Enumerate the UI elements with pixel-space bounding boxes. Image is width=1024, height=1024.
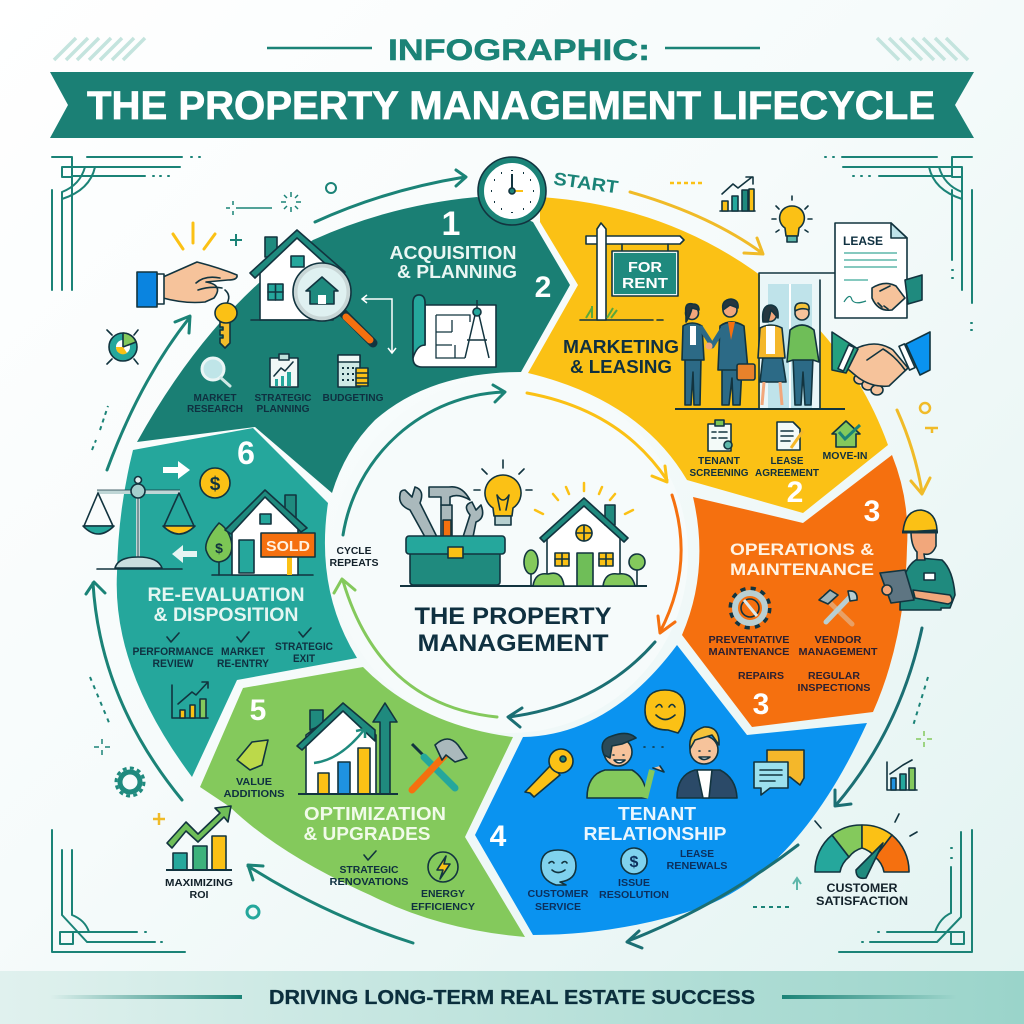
heading: optimization: & UPGRADES bbox=[304, 824, 430, 844]
panel: 6 re-evaluation: 6 bbox=[237, 435, 255, 471]
icon: scattered left decorations bbox=[90, 677, 259, 918]
centre: heading bbox=[414, 603, 612, 657]
icon: tenant figure bbox=[587, 733, 664, 798]
icon: plus bbox=[230, 234, 242, 246]
list: operations items: MAINTENANCE bbox=[708, 646, 790, 658]
icon: value additions bbox=[224, 740, 284, 800]
centre: heading: THE PROPERTY bbox=[414, 603, 612, 630]
icon: left sparks bbox=[92, 183, 336, 450]
list: re-evaluation items: PERFORMANCE bbox=[132, 646, 214, 658]
label: step 2: 2 bbox=[535, 271, 551, 304]
icon: sold house: SOLD bbox=[266, 538, 310, 555]
heading: acquisition bbox=[390, 243, 517, 282]
heading: re-evaluation: & DISPOSITION bbox=[154, 605, 298, 626]
heading: acquisition: ACQUISITION bbox=[390, 243, 516, 263]
item: energy efficiency: EFFICIENCY bbox=[411, 901, 475, 913]
icon: dashes bbox=[670, 182, 702, 184]
label: step 1: 1 bbox=[442, 205, 460, 243]
icon: for rent sign: RENT bbox=[622, 275, 668, 292]
bottom band: DRIVING LONG-TERM REAL ESTATE SUCCESS bbox=[269, 987, 755, 1009]
icon: doorway bbox=[675, 273, 845, 409]
label: step 4: 4 bbox=[490, 820, 507, 853]
icon: small chart bbox=[172, 682, 208, 718]
item: customer service bbox=[528, 850, 589, 913]
icon: agent figure bbox=[677, 727, 737, 798]
heading: re-evaluation bbox=[148, 585, 304, 626]
icon: woman agent bbox=[682, 304, 712, 405]
panel: 2 marketing and leasing bbox=[528, 197, 930, 513]
icon: customer satisfaction gauge: SATISFACTION bbox=[816, 894, 908, 908]
icon: small chart top bbox=[720, 177, 755, 211]
list: operations items: VENDOR bbox=[814, 634, 862, 646]
icon: smiley bubble bbox=[645, 690, 685, 733]
icon: big handshake bbox=[832, 332, 930, 395]
icon: for rent sign: FOR bbox=[628, 259, 662, 276]
item: move-in bbox=[822, 421, 868, 462]
icon: arrows and coin bbox=[163, 461, 230, 563]
panel: 3 operations and maintenance bbox=[682, 455, 955, 727]
item: budgeting bbox=[322, 355, 384, 404]
icon: scales bbox=[83, 476, 195, 569]
icon: small chart right and sparks bbox=[753, 677, 932, 907]
list: re-evaluation items: STRATEGIC bbox=[275, 641, 333, 653]
icon: arrows and coin: $ bbox=[210, 474, 221, 495]
label: cycle repeats: CYCLE bbox=[336, 545, 372, 557]
item: strategic planning: PLANNING bbox=[256, 403, 310, 415]
list: operations items: INSPECTIONS bbox=[798, 682, 870, 694]
heading: infographic: INFOGRAPHIC: bbox=[388, 34, 650, 67]
icon: dots bbox=[644, 746, 663, 748]
icon: blueprint and compass bbox=[413, 295, 496, 367]
icon: clock bbox=[478, 157, 546, 225]
icon: crossed hammer and screwdriver bbox=[412, 739, 467, 790]
heading: tenant relationship: RELATIONSHIP bbox=[584, 824, 726, 844]
heading: marketing: MARKETING bbox=[563, 337, 679, 357]
centre: house bbox=[524, 483, 645, 586]
heading: operations: MAINTENANCE bbox=[730, 560, 874, 579]
item: tenant screening bbox=[690, 420, 748, 479]
list: operations items: PREVENTATIVE bbox=[708, 634, 790, 646]
icon: key bbox=[525, 749, 573, 797]
icon: house with growth bbox=[297, 703, 398, 794]
item: lease renewals bbox=[666, 848, 728, 872]
panel: 5 optimization and upgrades bbox=[200, 667, 525, 937]
item: strategic planning: STRATEGIC bbox=[254, 392, 312, 404]
list: re-evaluation items: REVIEW bbox=[152, 658, 194, 670]
icon: value additions: VALUE bbox=[236, 776, 272, 788]
icon: sold house: $ bbox=[215, 540, 223, 556]
item: issue resolution: RESOLUTION bbox=[599, 889, 669, 901]
heading: operations: OPERATIONS & bbox=[730, 540, 874, 559]
item: move-in: MOVE-IN bbox=[822, 450, 868, 462]
centre: heading: MANAGEMENT bbox=[418, 630, 609, 657]
list: operations items: REPAIRS bbox=[738, 670, 784, 682]
icon: for rent sign bbox=[580, 223, 684, 320]
icon: maximizing roi chart: MAXIMIZING bbox=[165, 877, 233, 889]
icon: worker bbox=[880, 510, 955, 610]
decorative frame corners bbox=[52, 157, 972, 952]
icon: man tenant bbox=[787, 303, 819, 405]
icon: rays bbox=[173, 223, 215, 249]
centre: toolbox bbox=[400, 487, 647, 586]
item: issue resolution: ISSUE bbox=[618, 877, 650, 889]
item: lease renewals: LEASE bbox=[680, 848, 714, 860]
item: lease renewals: RENEWALS bbox=[666, 860, 728, 872]
list: re-evaluation items: MARKET bbox=[221, 646, 265, 658]
title banner bbox=[50, 72, 974, 138]
label: step 5: 5 bbox=[250, 694, 266, 727]
icon: pie chart bbox=[107, 330, 138, 364]
icon: sold house bbox=[206, 490, 315, 575]
heading: marketing: & LEASING bbox=[570, 357, 672, 377]
label: cycle repeats bbox=[330, 545, 378, 569]
icon: ring and cross right bbox=[920, 403, 938, 433]
icon: value additions: ADDITIONS bbox=[224, 788, 284, 800]
inner arrows bbox=[334, 385, 681, 727]
centre: bulb bbox=[474, 460, 532, 525]
centre disc bbox=[332, 377, 688, 733]
panel: 4 tenant relationship bbox=[475, 645, 867, 935]
list: operations items: MANAGEMENT bbox=[798, 646, 878, 658]
item: energy efficiency: ENERGY bbox=[421, 888, 465, 900]
icon: gear bbox=[731, 589, 769, 627]
item: strategic renovations: RENOVATIONS bbox=[330, 876, 408, 888]
item: market research bbox=[187, 358, 243, 415]
item: tenant screening: SCREENING bbox=[690, 467, 748, 479]
title banner: THE PROPERTY MANAGEMENT LIFECYCLE bbox=[87, 84, 935, 128]
icon: woman tenant bbox=[758, 305, 786, 405]
heading: optimization bbox=[304, 804, 446, 844]
icon: maximizing roi chart bbox=[165, 806, 233, 901]
icon: lease document with handshake bbox=[835, 223, 922, 318]
item: issue resolution: $ bbox=[630, 854, 639, 871]
label: step 3 upper: 3 bbox=[864, 495, 880, 528]
outer arrows bbox=[86, 170, 930, 948]
item: strategic renovations: STRATEGIC bbox=[340, 864, 399, 876]
icon: man agent with briefcase bbox=[706, 299, 755, 405]
bottom band bbox=[0, 971, 1024, 1024]
item: tenant screening: TENANT bbox=[698, 455, 741, 467]
label: step 3 lower: 3 bbox=[753, 688, 769, 721]
item: market research: MARKET bbox=[194, 392, 237, 404]
icon: customer satisfaction gauge: CUSTOMER bbox=[826, 881, 898, 895]
item: strategic planning bbox=[254, 354, 312, 415]
heading: acquisition: & PLANNING bbox=[397, 262, 517, 282]
item: strategic renovations bbox=[330, 851, 408, 888]
list: re-evaluation items bbox=[132, 628, 333, 670]
item: lease agreement: LEASE bbox=[770, 455, 804, 467]
icon: crossed tools bbox=[819, 590, 857, 624]
list: re-evaluation items: RE-ENTRY bbox=[217, 658, 270, 670]
icon: maximizing roi chart: ROI bbox=[190, 889, 209, 901]
label: cycle repeats: REPEATS bbox=[330, 557, 378, 569]
item: customer service: SERVICE bbox=[535, 901, 581, 913]
icon: house with magnifier bbox=[250, 230, 373, 343]
item: issue resolution bbox=[599, 848, 669, 901]
panel: 1 acquisition and planning bbox=[137, 197, 570, 493]
list: operations items bbox=[708, 634, 878, 694]
item: budgeting: BUDGETING bbox=[322, 392, 384, 404]
list: re-evaluation items: EXIT bbox=[293, 653, 315, 665]
item: market research: RESEARCH bbox=[187, 403, 243, 415]
item: customer service: CUSTOMER bbox=[528, 888, 589, 900]
heading: tenant relationship bbox=[584, 804, 726, 844]
panel: 6 re-evaluation bbox=[83, 428, 357, 777]
icon: corner arrow bbox=[362, 295, 396, 353]
item: energy efficiency bbox=[411, 852, 475, 913]
icon: chat bubbles bbox=[754, 750, 804, 795]
list: operations items: REGULAR bbox=[808, 670, 860, 682]
icon: bulb top right bbox=[772, 196, 812, 242]
heading: marketing bbox=[563, 337, 679, 377]
icon: hand with key bbox=[137, 262, 237, 348]
label: start: START bbox=[552, 169, 619, 197]
heading: re-evaluation: RE-EVALUATION bbox=[148, 585, 304, 606]
label: step 2 lower: 2 bbox=[787, 476, 803, 509]
heading: optimization: OPTIMIZATION bbox=[304, 804, 446, 824]
icon: customer satisfaction gauge bbox=[815, 814, 917, 908]
item: lease agreement: AGREEMENT bbox=[755, 467, 820, 479]
item: lease agreement bbox=[755, 422, 820, 479]
icon: lease document with handshake: LEASE bbox=[843, 236, 883, 248]
heading: operations bbox=[730, 540, 874, 579]
heading: tenant relationship: TENANT bbox=[618, 804, 696, 824]
